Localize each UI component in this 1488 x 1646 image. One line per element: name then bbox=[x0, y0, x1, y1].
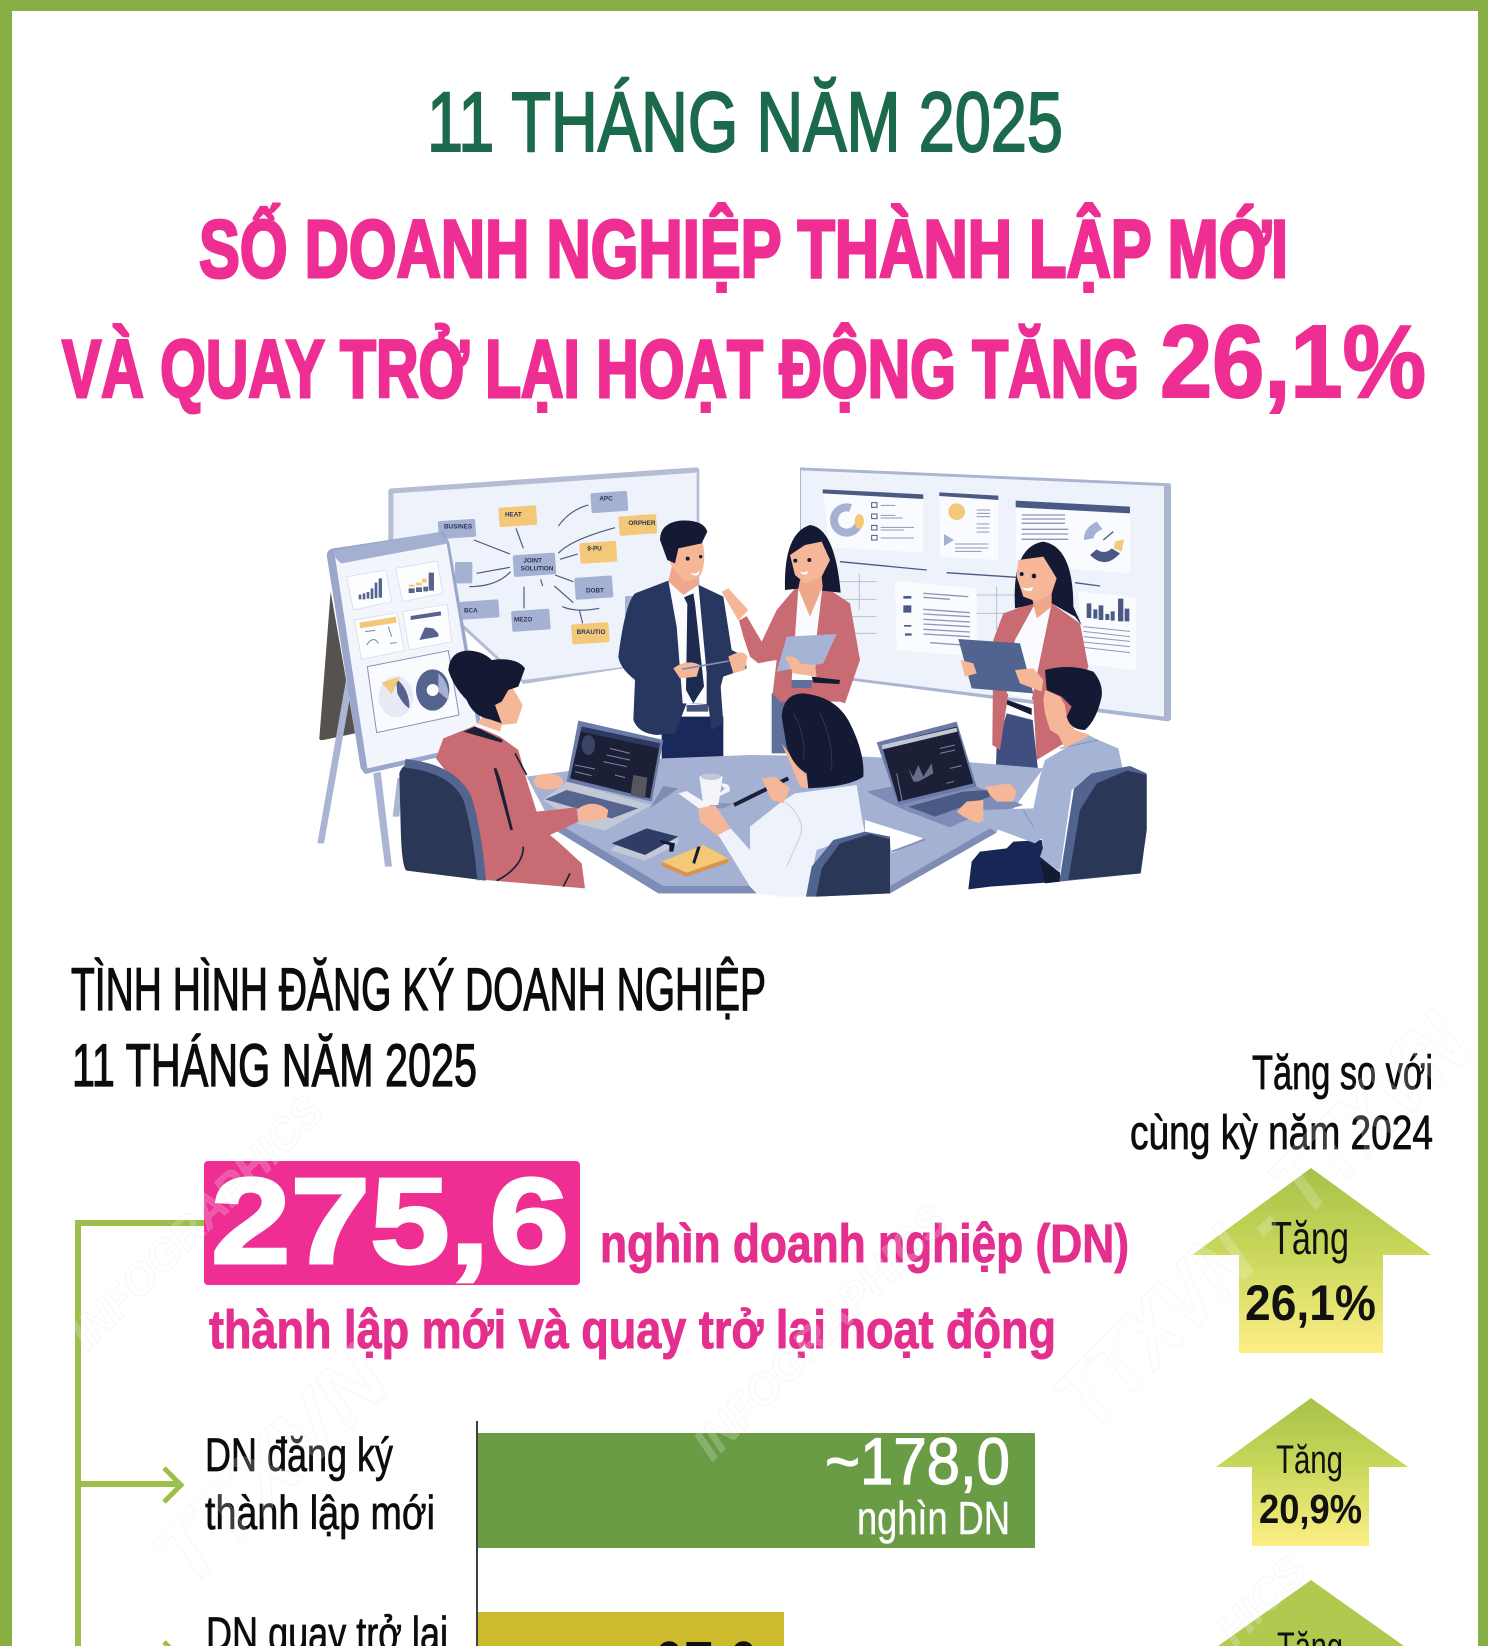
standing woman with blue tablet bbox=[958, 542, 1088, 773]
highlighted total number: 275,6 bbox=[211, 1153, 569, 1289]
title: main headline: 26,1% bbox=[1160, 304, 1426, 419]
laptop left bbox=[543, 721, 678, 831]
left whiteboard with mind map: APC bbox=[599, 496, 613, 503]
arrow: total up 26,1%: 26,1% bbox=[1245, 1275, 1376, 1331]
watermarks: TTXVN bbox=[133, 1328, 409, 1603]
arrow: total up 26,1% bbox=[1192, 1168, 1431, 1353]
watermarks bbox=[60, 993, 1488, 1646]
illustration: business team meeting bbox=[317, 467, 1171, 897]
right whiteboard with dashboards bbox=[800, 467, 1171, 721]
left whiteboard with mind map: HEAT bbox=[505, 512, 522, 519]
arrow: returning businesses up bbox=[1218, 1580, 1404, 1646]
left whiteboard with mind map: SOLUTION bbox=[521, 566, 554, 573]
paper and front chair bbox=[806, 820, 925, 897]
left whiteboard with mind map: BCA bbox=[464, 608, 478, 615]
bar chart axis bbox=[476, 1421, 478, 1646]
section heading: TÌNH HÌNH ĐĂNG KÝ DOANH NGHIỆP bbox=[71, 956, 766, 1023]
bar: new registrations 178,0: nghìn DN bbox=[857, 1492, 1010, 1544]
meeting table bbox=[527, 755, 1043, 893]
watermarks: INFOGRAPHICS bbox=[684, 1196, 958, 1469]
arrow: total up 26,1%: Tăng bbox=[1271, 1212, 1349, 1264]
total description text bbox=[209, 1214, 1129, 1360]
row label: new registrations: thành lập mới bbox=[205, 1486, 435, 1539]
standing woman with tablet bbox=[722, 525, 860, 753]
seated man at right bbox=[957, 667, 1147, 889]
left whiteboard with mind map: DOBT bbox=[586, 588, 604, 595]
left whiteboard with mind map: JOINT bbox=[523, 558, 542, 565]
coffee cup, pen and books on table bbox=[612, 773, 733, 877]
left whiteboard with mind map: MEZO bbox=[514, 616, 532, 623]
arrow: new registrations up 20,9%: Tăng bbox=[1276, 1438, 1343, 1482]
section heading bbox=[71, 956, 766, 1099]
laptop right bbox=[867, 722, 1023, 827]
section heading: 11 THÁNG NĂM 2025 bbox=[72, 1032, 477, 1099]
bar: returning businesses 97,6 bbox=[478, 1612, 784, 1646]
left whiteboard with mind map: ORPHER bbox=[628, 520, 656, 527]
arrow: new registrations up 20,9%: 20,9% bbox=[1259, 1486, 1362, 1532]
connector tree lines bbox=[78, 1223, 206, 1646]
title: period: 11 THÁNG NĂM 2025 bbox=[427, 75, 1063, 169]
row label: new registrations: DN đăng ký bbox=[205, 1428, 393, 1481]
bar: new registrations 178,0: ~178,0 bbox=[825, 1424, 1010, 1498]
row label: new registrations bbox=[205, 1428, 435, 1539]
left whiteboard with mind map: 8-PU bbox=[587, 546, 602, 553]
seated woman in red blazer bbox=[436, 651, 608, 888]
total description text: thành lập mới và quay trở lại hoạt động bbox=[209, 1300, 1056, 1360]
left whiteboard with mind map: BRAUTIO bbox=[577, 629, 606, 636]
seated woman with white blouse bbox=[698, 693, 865, 897]
comparison column label bbox=[1130, 1047, 1433, 1160]
flipchart with charts bbox=[317, 532, 485, 867]
title: main headline bbox=[62, 204, 1426, 419]
total description text: nghìn doanh nghiệp (DN) bbox=[600, 1214, 1129, 1274]
left whiteboard with mind map bbox=[388, 467, 699, 684]
watermarks: INFOGRAPHICS bbox=[60, 1086, 334, 1359]
arrow: new registrations up 20,9% bbox=[1216, 1398, 1408, 1546]
standing man in navy suit bbox=[618, 521, 747, 760]
bar: new registrations 178,0 bbox=[478, 1424, 1035, 1548]
left whiteboard with mind map: BUSINES bbox=[444, 523, 472, 530]
chair left bbox=[399, 763, 486, 881]
